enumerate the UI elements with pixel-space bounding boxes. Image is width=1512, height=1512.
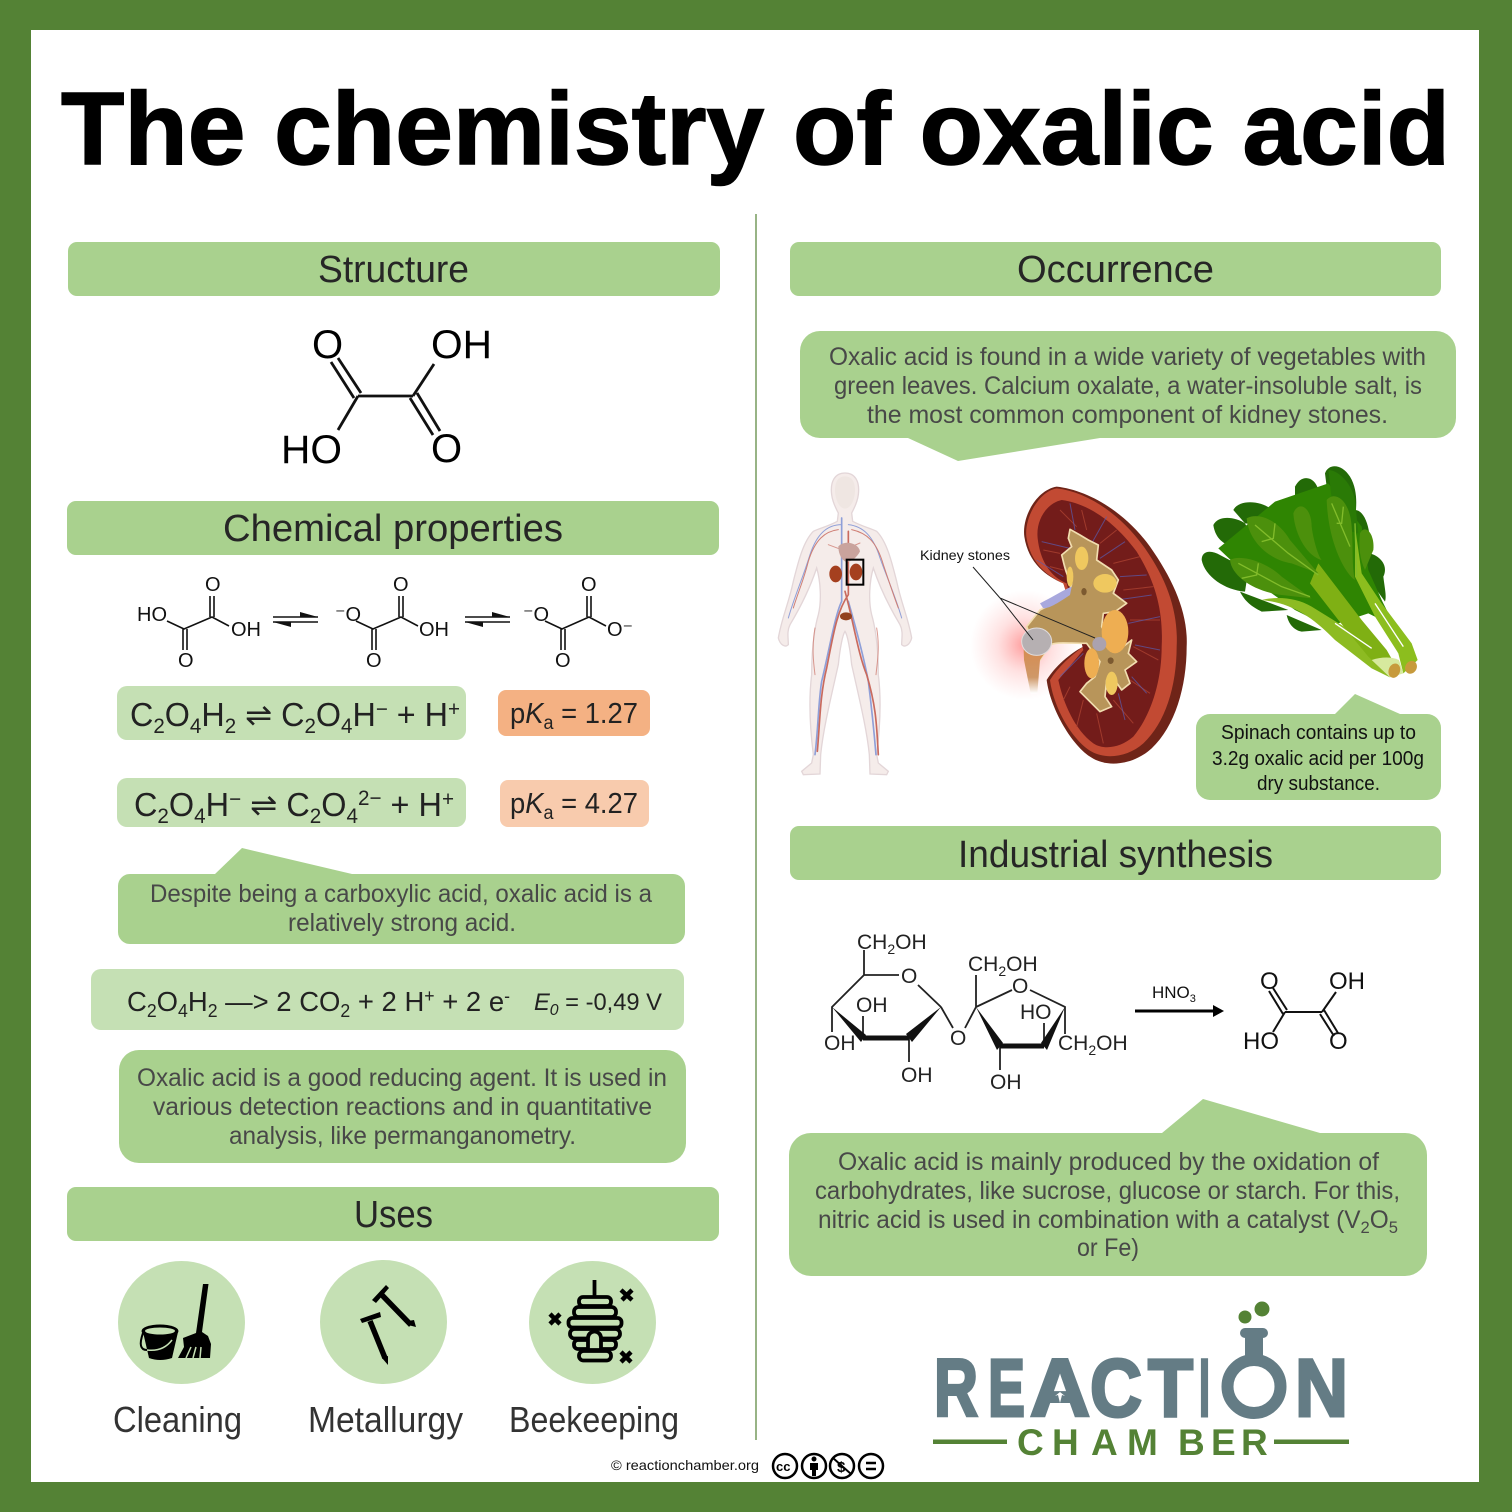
oxalic acid product: OH <box>1329 968 1365 995</box>
equation: first dissociation: − <box>376 698 388 721</box>
callout: vegetables and kidney stones: the most common component of kidney stones. <box>867 401 1388 429</box>
equation: second dissociation: H <box>206 786 229 823</box>
equation: second dissociation: + H <box>382 786 442 823</box>
deprotonation scheme: O <box>555 650 571 672</box>
sucrose structure: HO <box>1020 1001 1052 1024</box>
logo: reaction chamber: CHAMBER <box>1017 1422 1268 1463</box>
sucrose structure: 2 <box>998 963 1006 979</box>
equation: redox: + 2 e <box>435 986 504 1017</box>
logo: reaction chamber: T <box>1148 1343 1193 1434</box>
equation: second dissociation: ⇌ C <box>241 786 310 823</box>
equation: second dissociation: 4 <box>347 805 358 828</box>
logo: reaction chamber: R <box>934 1343 978 1434</box>
equation: redox: 4 <box>178 1001 188 1021</box>
heading: occurrence <box>790 242 1441 296</box>
deprotonation scheme: O <box>581 574 597 596</box>
deprotonation scheme: O <box>178 650 194 672</box>
equation: redox: + 2 H <box>350 986 424 1017</box>
equation: redox: 2 <box>147 1001 157 1021</box>
label: cleaning: Cleaning <box>113 1399 242 1440</box>
badge: pKa 4.27 <box>500 780 649 827</box>
arrow: reaction with HNO3: 3 <box>1190 993 1196 1005</box>
illustration: kidney with stones <box>920 487 1187 764</box>
sucrose structure: CH <box>857 931 887 954</box>
icons: creative commons licence: $ <box>837 1459 846 1476</box>
equation: second dissociation <box>117 778 466 828</box>
equation: second dissociation: + <box>442 788 454 811</box>
logo: reaction chamber: N <box>1295 1343 1348 1434</box>
equation: redox: E <box>534 989 551 1016</box>
label: kidney stones: Kidney stones <box>920 547 1010 563</box>
badge: pKa 1.27: pK <box>510 698 545 730</box>
heading: structure <box>68 242 720 296</box>
equation: redox: —> 2 CO <box>218 986 340 1017</box>
structure of oxalic acid: O <box>312 323 343 367</box>
oxalic acid product: HO <box>1243 1028 1279 1055</box>
structure of oxalic acid: OH <box>431 323 492 367</box>
logo: reaction chamber: A <box>1030 1343 1090 1434</box>
sucrose structure: OH <box>856 994 888 1017</box>
equation: first dissociation: + H <box>388 696 448 733</box>
icon: beekeeping <box>509 1261 679 1440</box>
structure of oxalic acid <box>281 323 492 472</box>
equation: second dissociation: 2 <box>157 805 169 828</box>
equation: first dissociation: ⇌ C <box>236 696 304 733</box>
panel: occurrence <box>778 242 1456 800</box>
callout: vegetables and kidney stones: Oxalic acid is found in a wide variety of vegetables with <box>829 343 1426 371</box>
title: The chemistry of oxalic acid <box>61 71 1450 186</box>
callout: reducing agent: analysis, like permanganometry. <box>229 1122 576 1150</box>
logo: reaction chamber <box>933 1302 1349 1463</box>
copyright: © reactionchamber.org <box>611 1457 759 1473</box>
badge: pKa 4.27: = 4.27 <box>553 788 638 820</box>
equation: second dissociation: O <box>169 786 194 823</box>
heading: uses: Uses <box>354 1194 433 1236</box>
equation: second dissociation: O <box>321 786 347 823</box>
illustration: human body <box>778 473 912 775</box>
icons: creative commons licence <box>773 1454 883 1478</box>
deprotonation scheme: O⁻ <box>607 619 633 641</box>
logo: reaction chamber: E <box>988 1343 1025 1434</box>
heading: chemical properties: Chemical properties <box>223 508 563 550</box>
heading: structure: Structure <box>318 249 469 291</box>
panel: industrial synthesis <box>789 826 1441 1276</box>
callout: oxidation of carbohydrates: O <box>1370 1206 1389 1234</box>
equation: first dissociation <box>117 686 466 740</box>
heading: industrial synthesis <box>790 826 1441 880</box>
icon: cleaning <box>113 1261 245 1440</box>
logo: reaction chamber: I <box>1199 1343 1210 1434</box>
sucrose structure: OH <box>1096 1032 1128 1055</box>
equation: second dissociation: − <box>229 788 241 811</box>
equation: redox: - <box>504 986 510 1006</box>
callout: reducing agent: Oxalic acid is a good reducing agent. It is used in <box>137 1064 667 1092</box>
equation: redox: O <box>157 986 178 1017</box>
icons: creative commons licence: cc <box>776 1459 790 1474</box>
deprotonation scheme: ⁻O <box>523 604 549 626</box>
panel: uses <box>67 1187 719 1440</box>
callout: reducing agent: various detection reactions and in quantitative <box>153 1093 652 1121</box>
equation: redox: 2 <box>208 1001 218 1021</box>
structure of oxalic acid: HO <box>281 428 342 472</box>
sucrose structure: O <box>901 965 917 988</box>
callout: spinach: 3.2g oxalic acid per 100g <box>1212 748 1424 770</box>
callout: spinach: dry substance. <box>1257 773 1380 795</box>
equation: first dissociation: 4 <box>190 715 202 738</box>
badge: pKa 1.27: a <box>544 713 554 734</box>
equation: first dissociation: + <box>448 698 460 721</box>
equation: first dissociation: O <box>165 696 190 733</box>
callout: oxidation of carbohydrates: 2 <box>1361 1218 1370 1237</box>
oxalic acid product <box>1243 968 1365 1055</box>
callout: strong acid <box>118 848 685 944</box>
callout: vegetables and kidney stones <box>800 331 1456 461</box>
badge: pKa 4.27: pK <box>510 788 545 820</box>
equation: redox: = -0,49 V <box>559 989 662 1016</box>
heading: uses <box>67 1187 719 1241</box>
equation: second dissociation: 2− <box>358 787 382 810</box>
callout: spinach: Spinach contains up to <box>1221 722 1416 744</box>
heading: occurrence: Occurrence <box>1017 249 1214 291</box>
equation: first dissociation: 2 <box>304 715 316 738</box>
panel: chemical properties <box>67 501 719 1163</box>
oxalic acid product: O <box>1329 1028 1348 1055</box>
callout: oxidation of carbohydrates: 5 <box>1389 1218 1398 1237</box>
callout: oxidation of carbohydrates <box>789 1099 1427 1276</box>
equation: first dissociation: C <box>130 696 154 733</box>
callout: strong acid: Despite being a carboxylic acid, oxalic acid is a <box>150 880 652 908</box>
equation: redox: 0 <box>550 1002 559 1019</box>
logo: reaction chamber: C <box>1090 1343 1142 1434</box>
panel: structure <box>68 242 720 472</box>
sucrose structure <box>824 931 1128 1094</box>
structure of oxalic acid: O <box>431 427 462 471</box>
label: metallurgy: Metallurgy <box>308 1399 463 1440</box>
equation: redox: + <box>424 986 435 1006</box>
callout: spinach <box>1196 694 1441 800</box>
sucrose structure: OH <box>895 931 927 954</box>
sucrose structure: OH <box>990 1071 1022 1094</box>
equation: second dissociation: C <box>134 786 158 823</box>
callout: oxidation of carbohydrates: nitric acid is used in combination with a catalyst (V <box>818 1206 1374 1234</box>
equation: redox: 2 <box>340 1001 350 1021</box>
callout: oxidation of carbohydrates: or Fe) <box>1077 1234 1139 1262</box>
sucrose structure: O <box>1012 975 1028 998</box>
deprotonation scheme <box>137 574 633 672</box>
illustration: spinach <box>1202 466 1419 679</box>
icon: metallurgy <box>308 1260 463 1440</box>
heading: industrial synthesis: Industrial synthesis <box>958 834 1273 876</box>
arrow: reaction with HNO3 <box>1135 983 1224 1017</box>
callout: vegetables and kidney stones: green leaves. Calcium oxalate, a water-insoluble salt, is <box>834 372 1422 400</box>
equation: first dissociation: 4 <box>341 715 353 738</box>
deprotonation scheme: OH <box>419 619 449 641</box>
equation: first dissociation: O <box>316 696 341 733</box>
callout: oxidation of carbohydrates: carbohydrates, like sucrose, glucose or starch. For this, <box>815 1177 1400 1205</box>
equation: first dissociation: 2 <box>153 715 165 738</box>
callout: oxidation of carbohydrates: Oxalic acid is mainly produced by the oxidation of <box>838 1148 1379 1176</box>
deprotonation scheme: O <box>205 574 221 596</box>
badge: pKa 1.27: = 1.27 <box>553 698 638 730</box>
badge: pKa 1.27 <box>498 690 650 736</box>
sucrose structure: OH <box>1006 953 1038 976</box>
badge: pKa 4.27: a <box>544 803 554 824</box>
sucrose structure: OH <box>824 1032 856 1055</box>
label: beekeeping: Beekeeping <box>509 1399 679 1440</box>
equation: first dissociation: H <box>201 696 225 733</box>
equation: redox <box>91 969 684 1030</box>
equation: redox: C <box>127 986 147 1017</box>
deprotonation scheme: O <box>393 574 409 596</box>
equation: second dissociation: 2 <box>310 805 321 828</box>
sucrose structure: O <box>950 1027 966 1050</box>
oxalic acid product: O <box>1260 968 1279 995</box>
deprotonation scheme: ⁻O <box>335 604 361 626</box>
sucrose structure: 2 <box>887 941 895 957</box>
arrow: reaction with HNO3: HNO <box>1152 983 1190 1002</box>
equation: redox: H <box>188 986 208 1017</box>
deprotonation scheme: OH <box>231 619 261 641</box>
deprotonation scheme: O <box>366 650 382 672</box>
equation: first dissociation: H <box>352 696 376 733</box>
sucrose structure: CH <box>1058 1032 1088 1055</box>
heading: chemical properties <box>67 501 719 555</box>
equation: second dissociation: 4 <box>194 805 206 828</box>
callout: reducing agent <box>119 1050 686 1163</box>
callout: strong acid: relatively strong acid. <box>288 909 516 937</box>
sucrose structure: OH <box>901 1064 932 1087</box>
deprotonation scheme: HO <box>137 604 167 626</box>
equation: first dissociation: 2 <box>225 715 236 738</box>
sucrose structure: CH <box>968 953 998 976</box>
sucrose structure: 2 <box>1088 1042 1096 1058</box>
